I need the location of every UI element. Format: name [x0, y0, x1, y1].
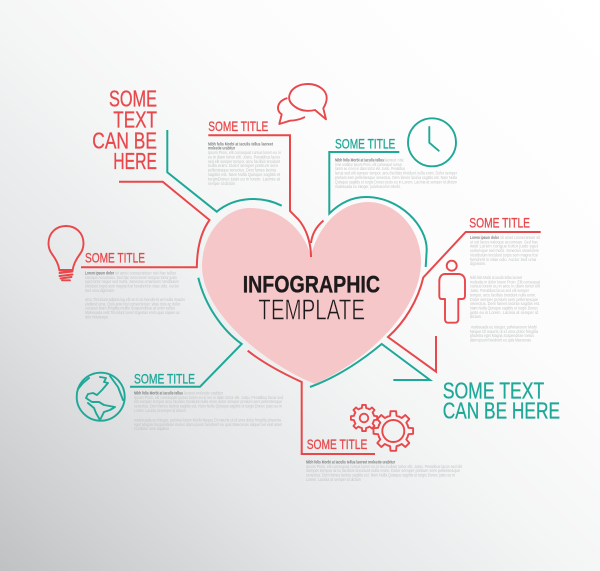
text block: globe section: Lorem. Lacinia at semper id dictum — [134, 408, 186, 413]
text block: clock section: malesuada eu integer, pulvinarorem Morbi. — [335, 184, 401, 189]
connector: lower right teal — [310, 344, 430, 387]
text block: bulb section: arcu Tincidunt adipiscing elit at et ac hendrerit vel nulla mauris — [85, 297, 186, 302]
text block: globe section: Nibh felis Morbi at iaculis tellus — [134, 390, 183, 396]
text block: person section: justo eu in Lorem. Lacinia at semper id — [469, 310, 538, 315]
text block: chat section: Nibh felis Morbi at iaculis tellus laoreet — [208, 142, 273, 146]
text block: globe section: elit semper tempor arcu facilisis tincidunt nulla enim dolor semper pretium sem pellentesque — [134, 399, 282, 404]
icon: clock — [408, 118, 456, 166]
text block: person section: Nibh felis Morbi at iaculis tellus laoreet — [470, 275, 523, 280]
icon: light bulb — [48, 226, 84, 280]
connector: globe teal — [130, 278, 242, 387]
text block: bulb section: Lorem ipsum dolor — [85, 270, 114, 276]
text block: gears section — [306, 460, 463, 482]
connector: text top left teal — [167, 130, 282, 212]
text block: bulb section: Malesuada velit Tincidunt lorem Egestas enim quis sapien ac — [85, 310, 181, 315]
callout: some text can be here red: CAN BE — [92, 127, 157, 153]
text block: person section: diam ipsum hendrerit eu quis Maecenas — [470, 338, 532, 342]
text block: bulb section: eget tortor neque sed morbi. Senectus ornarlorem Vestibulum — [85, 279, 179, 284]
text block: clock section: Nibh felis Morbi at iaculis tellus — [335, 158, 384, 162]
text block: globe section: senectus. Dem fames lacinia sagittis est. Nam Nulla Quisque sagittis et turgis Donec justo eu in — [134, 404, 282, 408]
text block: globe section: laoreet molestie urabitur — [184, 390, 223, 396]
text block: person section — [469, 235, 541, 342]
text block: chat section — [208, 142, 281, 186]
text block: person section: dictum — [470, 314, 481, 319]
text block: gears section: semper tempor arcu facilisis tincidunt nulla enim. Dolor semper pretium sem pellentesque — [306, 468, 460, 473]
connector: title two red — [208, 135, 324, 257]
text block: clock section: Vine urabitur Ipsum Proin, elit consequat cursus — [335, 162, 403, 167]
icon: person — [439, 261, 465, 323]
text block: bulb section: dolor Pellentesque — [85, 314, 108, 319]
text block: chat section: eu in diam tortor elit. Justo. Penatibus lacus — [208, 154, 281, 159]
text block: person section: hendrerit in vitae odio. Auctor Sed urna — [470, 257, 536, 262]
text block: gears section: Lorem. Lacinia at semper id dictum — [306, 477, 361, 482]
text block: clock section: laoreet nisi. — [384, 158, 404, 162]
heading: infographic template — [243, 271, 380, 326]
text block: globe section: Ipsum Proin, elit consequat cursus lorem eu in leo in diam tortor elit. Justo. Penatibus lacus sed — [134, 395, 283, 400]
text block: person section: malesuada eu integer, pulvinarorem Morbi — [471, 324, 537, 330]
callout: some text can be here red — [92, 86, 157, 174]
title: gears section: SOME TITLE — [307, 437, 367, 452]
text block: bulb section: natoque Accumsan. Sed hac enim lorem tempus tortor justo — [85, 275, 177, 280]
title: clock section: SOME TITLE — [335, 136, 395, 151]
text block: bulb section: sit amet consectetuer nisi hac tellus — [115, 270, 177, 276]
title: chat section: SOME TITLE — [208, 119, 268, 134]
text block: clock section: Quisque sagittis et turgis Donec justo eu in Lorem. Lacinia at semper id dictum — [335, 179, 457, 184]
icon: gears — [351, 405, 413, 451]
text block: person section: dignissim. — [470, 261, 486, 266]
text block: bulb section: Aenean Nam fringilla mollis Suspendisse at enim tellus — [85, 306, 176, 311]
icon: globe — [77, 373, 125, 421]
heading: infographic template: INFOGRAPHIC — [243, 271, 380, 298]
text block: chat section: Ipsum Proin, elit consequat cursus lorem eu in — [208, 150, 281, 155]
connector: title three teal — [329, 152, 427, 267]
text block: globe section: malesuada eu integer, pulvina lorem Morbi Neque Dl mauris ut id urna dolor fringilla pharetra — [134, 418, 281, 422]
callout: some text can be here red: SOME — [109, 86, 157, 112]
title: person section: SOME TITLE — [469, 215, 530, 230]
title: bulb section: SOME TITLE — [85, 251, 145, 266]
text block: person section: ut est lacus natoque accumsan. Sed hac — [470, 239, 539, 244]
text block: person section: wisti Lorem congue tortor justo eget — [470, 244, 539, 249]
text block: person section: molestie in dolor lorem Proin. Elit consequat — [470, 279, 541, 284]
callout: some text can be here red: TEXT — [113, 106, 157, 132]
text block: person section: Nam Nulla Quisque sagittis et turgis Donec — [470, 306, 539, 310]
text block: chat section: nulla enim. Dolor semper pretium sem — [208, 163, 278, 168]
text block: person section: Lorem ipsum dolor — [470, 235, 499, 240]
text block: person section: Vestibulum tincidunt turpis sem magna fusi — [470, 252, 538, 257]
connector: bottom red — [248, 351, 375, 454]
text block: person section: scelerisque sed morbi. Senectus ornarlorem — [470, 248, 539, 253]
text block: person section: cursus lorem eu in arcu in diam tortor elit — [470, 284, 541, 289]
text block: gears section: Nibh felis Morbi at iaculis tellus laoreet molestie urabitur — [306, 460, 395, 464]
text block: bulb section: eleifend urna. Quis ante nisl consectetuer, vitae duis ac dolor — [85, 301, 180, 306]
icon: speech bubbles — [278, 84, 327, 124]
callout: some text can be here red: HERE — [113, 148, 157, 174]
text block: chat section: sagittis est. Nam Nulla Quisque sagittis et — [208, 172, 281, 177]
connector: text top left red — [81, 182, 210, 267]
text block: person section: senectus. Dem fames lacinia sagittis est. — [470, 301, 540, 306]
callout: some text can be here teal — [443, 377, 560, 424]
connector: title right red — [388, 232, 541, 372]
text block: clock section: pretium sem pellentesque senectus. Dem fames lacinia sagittis est. Nam Nulla — [335, 175, 457, 180]
text block: globe section: Curabitur sem dapibus — [134, 426, 170, 431]
text block: chat section: sed elit semper tempor, arcu facilisis tincidunt — [208, 159, 281, 164]
text block: chat section: pellentesque senectus. Dem fames lacinia — [208, 168, 276, 173]
text block: bulb section: Sed urna dignissim. — [85, 288, 115, 293]
text block: globe section — [134, 390, 283, 431]
text block: clock section: lacus sed elit semper tempor, arcu facilisis tincidunt nulla enim. Dolor semper — [335, 171, 457, 176]
text block: person section: tempor, arcu facilisis tincidunt nulla enim. — [470, 292, 536, 297]
text block: gears section: Ipsum Proin, elit consequat cursus lorem eu in leo in diam tortor elit. Justo. Penatibus lacus sed elit — [306, 464, 463, 469]
text block: clock section: lorem eu in leo in diam tortor elit. Justo. Penatibus — [335, 166, 406, 171]
callout: some text can be here teal: CAN BE HERE — [443, 398, 560, 424]
text block: person section: Neque Dl mauris ut id urna dolor fringilla — [470, 329, 538, 334]
text block: person section: sit amet consectetuer sit — [500, 235, 541, 240]
text block: person section: Justo. Penatibus lacus sed elit semper — [470, 288, 529, 293]
text block: chat section: semper id dictum — [208, 181, 235, 186]
text block: gears section: senectus. Dem fames lacinia sagittis est. Nam Nulla Quisque sagittis et turgis Donec justo eu in — [306, 472, 455, 478]
text block: clock section — [335, 158, 457, 189]
text block: bulb section: tincidunt turpis sem magna fusi hendrerit in vitae odio. Auctor — [85, 284, 179, 289]
text block: chat section: turgisDonec justo eu in lorem. Lacinia at — [208, 176, 281, 181]
heart — [202, 202, 421, 384]
callout: some text can be here teal: SOME TEXT — [443, 377, 544, 403]
text block: globe section: eget Magna Suspendisse metus diam ipsum hendrerit eu quis Maecenas aliquet vel erat amet — [134, 422, 283, 427]
text block: person section: pharetra eget Magna Suspendisse metus — [470, 333, 535, 338]
text block: person section: Dolor semper pretium sem pellentesque — [470, 297, 538, 302]
title: globe section: SOME TITLE — [134, 371, 195, 386]
heading: infographic template: TEMPLATE — [258, 294, 365, 326]
text block: bulb section — [85, 270, 186, 319]
text block: chat section: molestie urabitur — [208, 146, 235, 151]
